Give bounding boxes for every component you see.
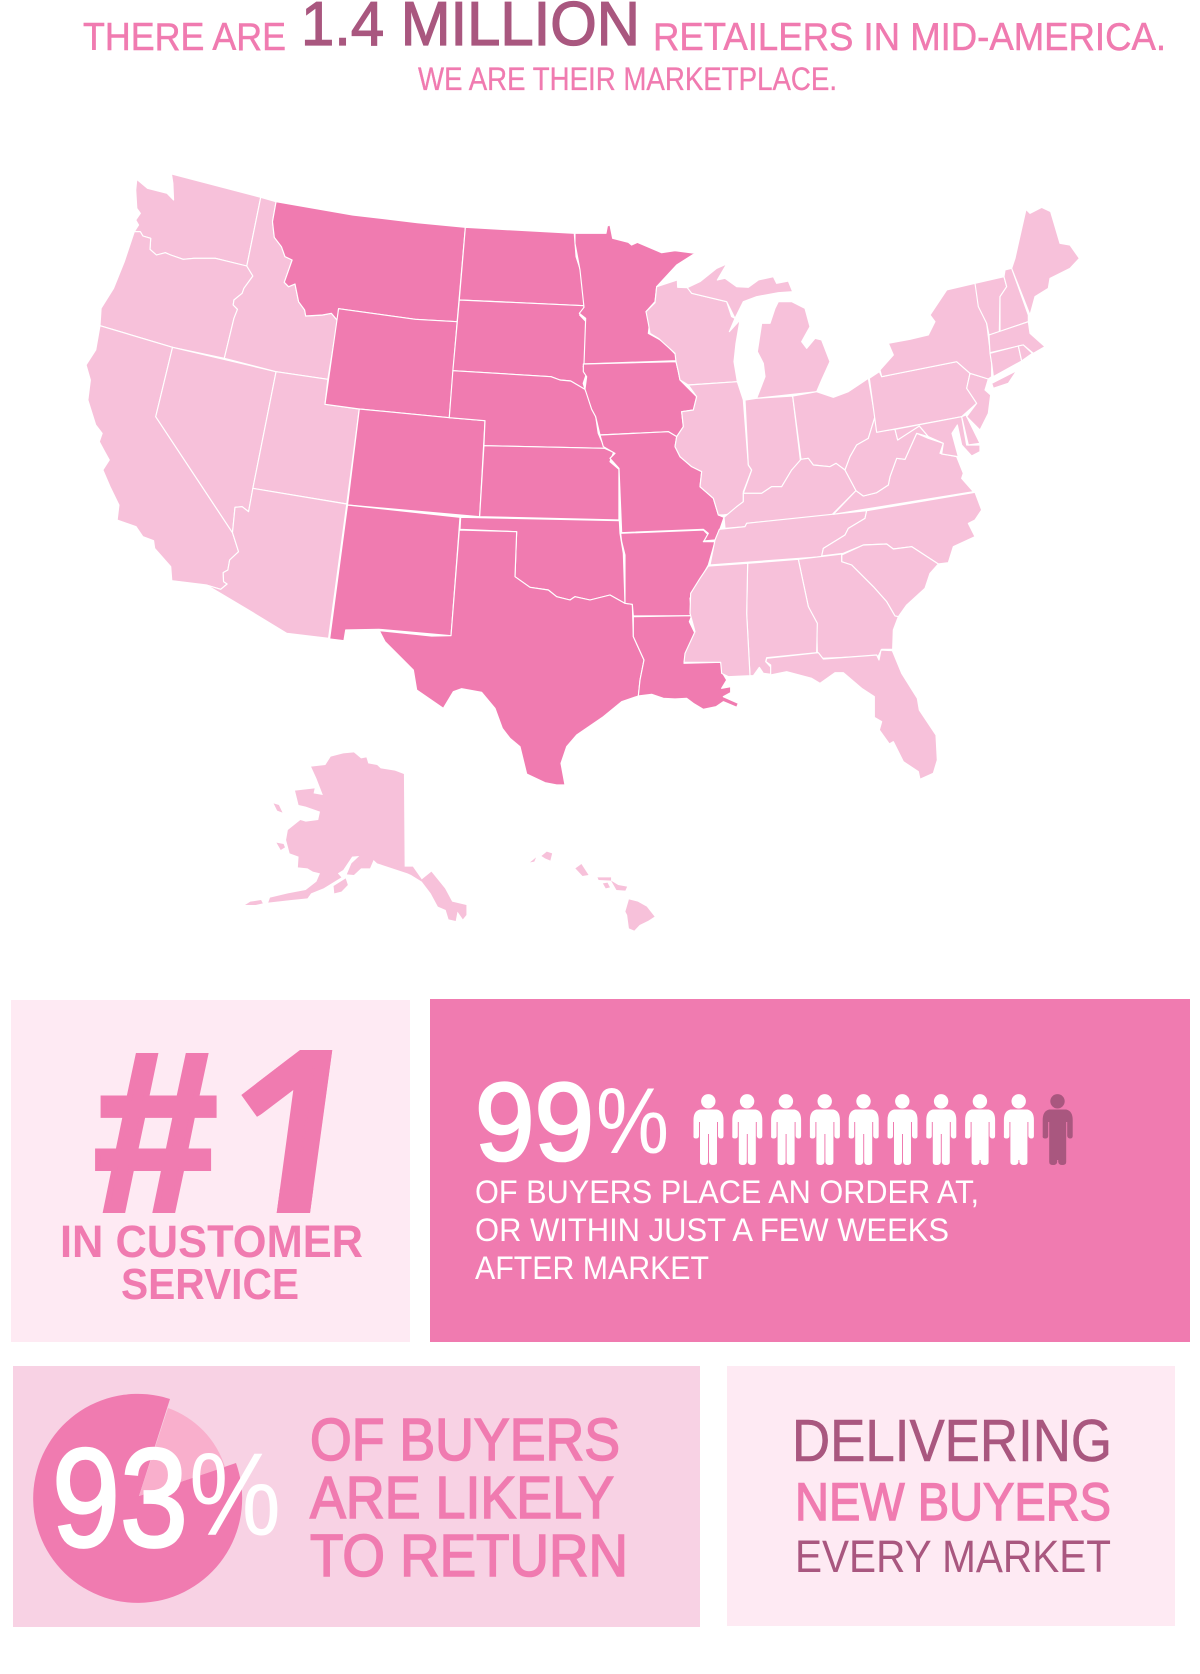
New Jersey [967,373,991,430]
person 1 [693,1094,724,1165]
Wyoming [325,309,457,418]
Oregon [100,232,253,358]
percent sign: % [596,1068,669,1173]
panel: #1 in customer service [11,1000,410,1342]
Florida [766,650,937,779]
pie chart: 93 percent [33,1394,242,1603]
Alaska: St Lawrence Island [274,803,282,813]
Oklahoma [460,517,625,603]
headline part: retailers in mid-america: RETAILERS IN MID-AMERICA. [653,16,1166,59]
person 6 [887,1094,918,1165]
eastern states [583,207,1079,677]
panel: delivering new buyers every market [727,1366,1175,1626]
Michigan lower peninsula [757,302,830,398]
panel: 99% of buyers [430,999,1190,1342]
Wisconsin [646,280,740,385]
Rhode Island [1018,345,1032,361]
statement line 3: TO RETURN [310,1523,628,1589]
title: header statement [83,0,1166,97]
description line 2: OR WITHIN JUST A FEW WEEKS [475,1212,949,1248]
big number: 1: 1 [215,1000,383,1264]
person 4 [810,1094,840,1165]
statement line 1: OF BUYERS [310,1407,620,1473]
Arkansas [621,530,715,616]
panel background [11,1000,410,1342]
Massachusetts [989,322,1045,353]
Michigan upper peninsula [687,264,793,318]
Montana [272,202,465,322]
headline part: there are: THERE ARE [83,16,286,59]
Arizona [206,488,347,638]
Pennsylvania [869,362,977,432]
New Hampshire [1000,268,1028,332]
Idaho [224,197,337,379]
Hawaii: Niihau [530,857,536,862]
Colorado [347,409,485,517]
big number: 99: 99 [475,1061,594,1184]
caption line 1: IN CUSTOMER [60,1216,363,1267]
statement line 2: ARE LIKELY [310,1465,614,1531]
Hawaii: Lanai [603,883,610,888]
description line 1: OF BUYERS PLACE AN ORDER AT, [475,1174,979,1210]
Illinois [675,382,752,515]
Alaska and Hawaii [245,752,655,931]
Texas [379,530,644,785]
Alaska: Nunivak Island [276,843,285,850]
Alaska: Kodiak Island [334,878,348,893]
pictogram: ten people, nine white one dark [693,1094,1073,1165]
Washington [134,174,261,266]
person 10: dark [1043,1094,1073,1165]
Long Island [992,371,1017,388]
South Carolina [842,544,938,617]
Minnesota [575,225,695,364]
Nevada [156,347,276,533]
person 9 [1004,1094,1034,1165]
North Dakota [459,227,584,306]
Maine [1012,207,1079,315]
New York [880,283,992,379]
person 3 [771,1094,801,1165]
person 2 [732,1094,762,1165]
Vermont [975,277,1007,335]
Maryland [895,417,980,457]
big symbol: hash: # [91,1005,214,1258]
Utah [253,372,359,504]
Mississippi [684,563,750,677]
line: new buyers: NEW BUYERS [795,1473,1111,1532]
Alaska mainland [268,752,466,921]
Louisiana [633,616,738,709]
Hawaii: Maui [611,881,627,891]
California [86,326,239,589]
Kentucky [724,458,856,528]
Iowa [583,362,697,437]
caption line 2: SERVICE [121,1260,299,1309]
South Dakota [453,300,587,389]
pie remainder slice [139,1408,225,1496]
Alaska: Aleutian Islands [245,900,263,905]
percent sign: % [189,1429,281,1561]
panel: 93% likely to return [13,1366,700,1627]
Ohio [793,378,875,470]
Delaware [962,415,980,445]
person 7 [926,1094,956,1165]
panel background [430,999,1190,1342]
Hawaii: Kauai [541,852,552,861]
line: delivering: DELIVERING [792,1408,1112,1474]
Indiana [743,396,801,493]
person 8 [965,1094,995,1165]
Tennessee [710,511,867,565]
line: every market: EVERY MARKET [795,1531,1111,1582]
panel background [13,1366,700,1627]
Hawaii: Molokai [597,877,611,881]
description line 3: AFTER MARKET [475,1250,709,1286]
Alabama [747,559,817,676]
Hawaii: Oahu [575,864,589,876]
Nebraska [449,371,605,448]
West Virginia [845,417,928,496]
western and plains states [86,174,619,641]
map: United States with mid-America highlighted [86,174,1079,931]
Connecticut [990,346,1022,377]
big number: 93: 93 [52,1419,188,1576]
person 5 [849,1094,879,1165]
Hawaii: Big Island [625,899,655,931]
southern plains states [379,517,738,785]
subtitle: WE ARE THEIR MARKETPLACE. [418,61,837,97]
North Carolina [822,492,982,564]
panel background [727,1366,1175,1626]
Missouri [600,432,724,541]
pie main slice [33,1394,242,1603]
Georgia [798,554,898,658]
New Mexico [330,505,460,641]
Kansas [480,446,619,520]
Virginia [833,433,973,514]
